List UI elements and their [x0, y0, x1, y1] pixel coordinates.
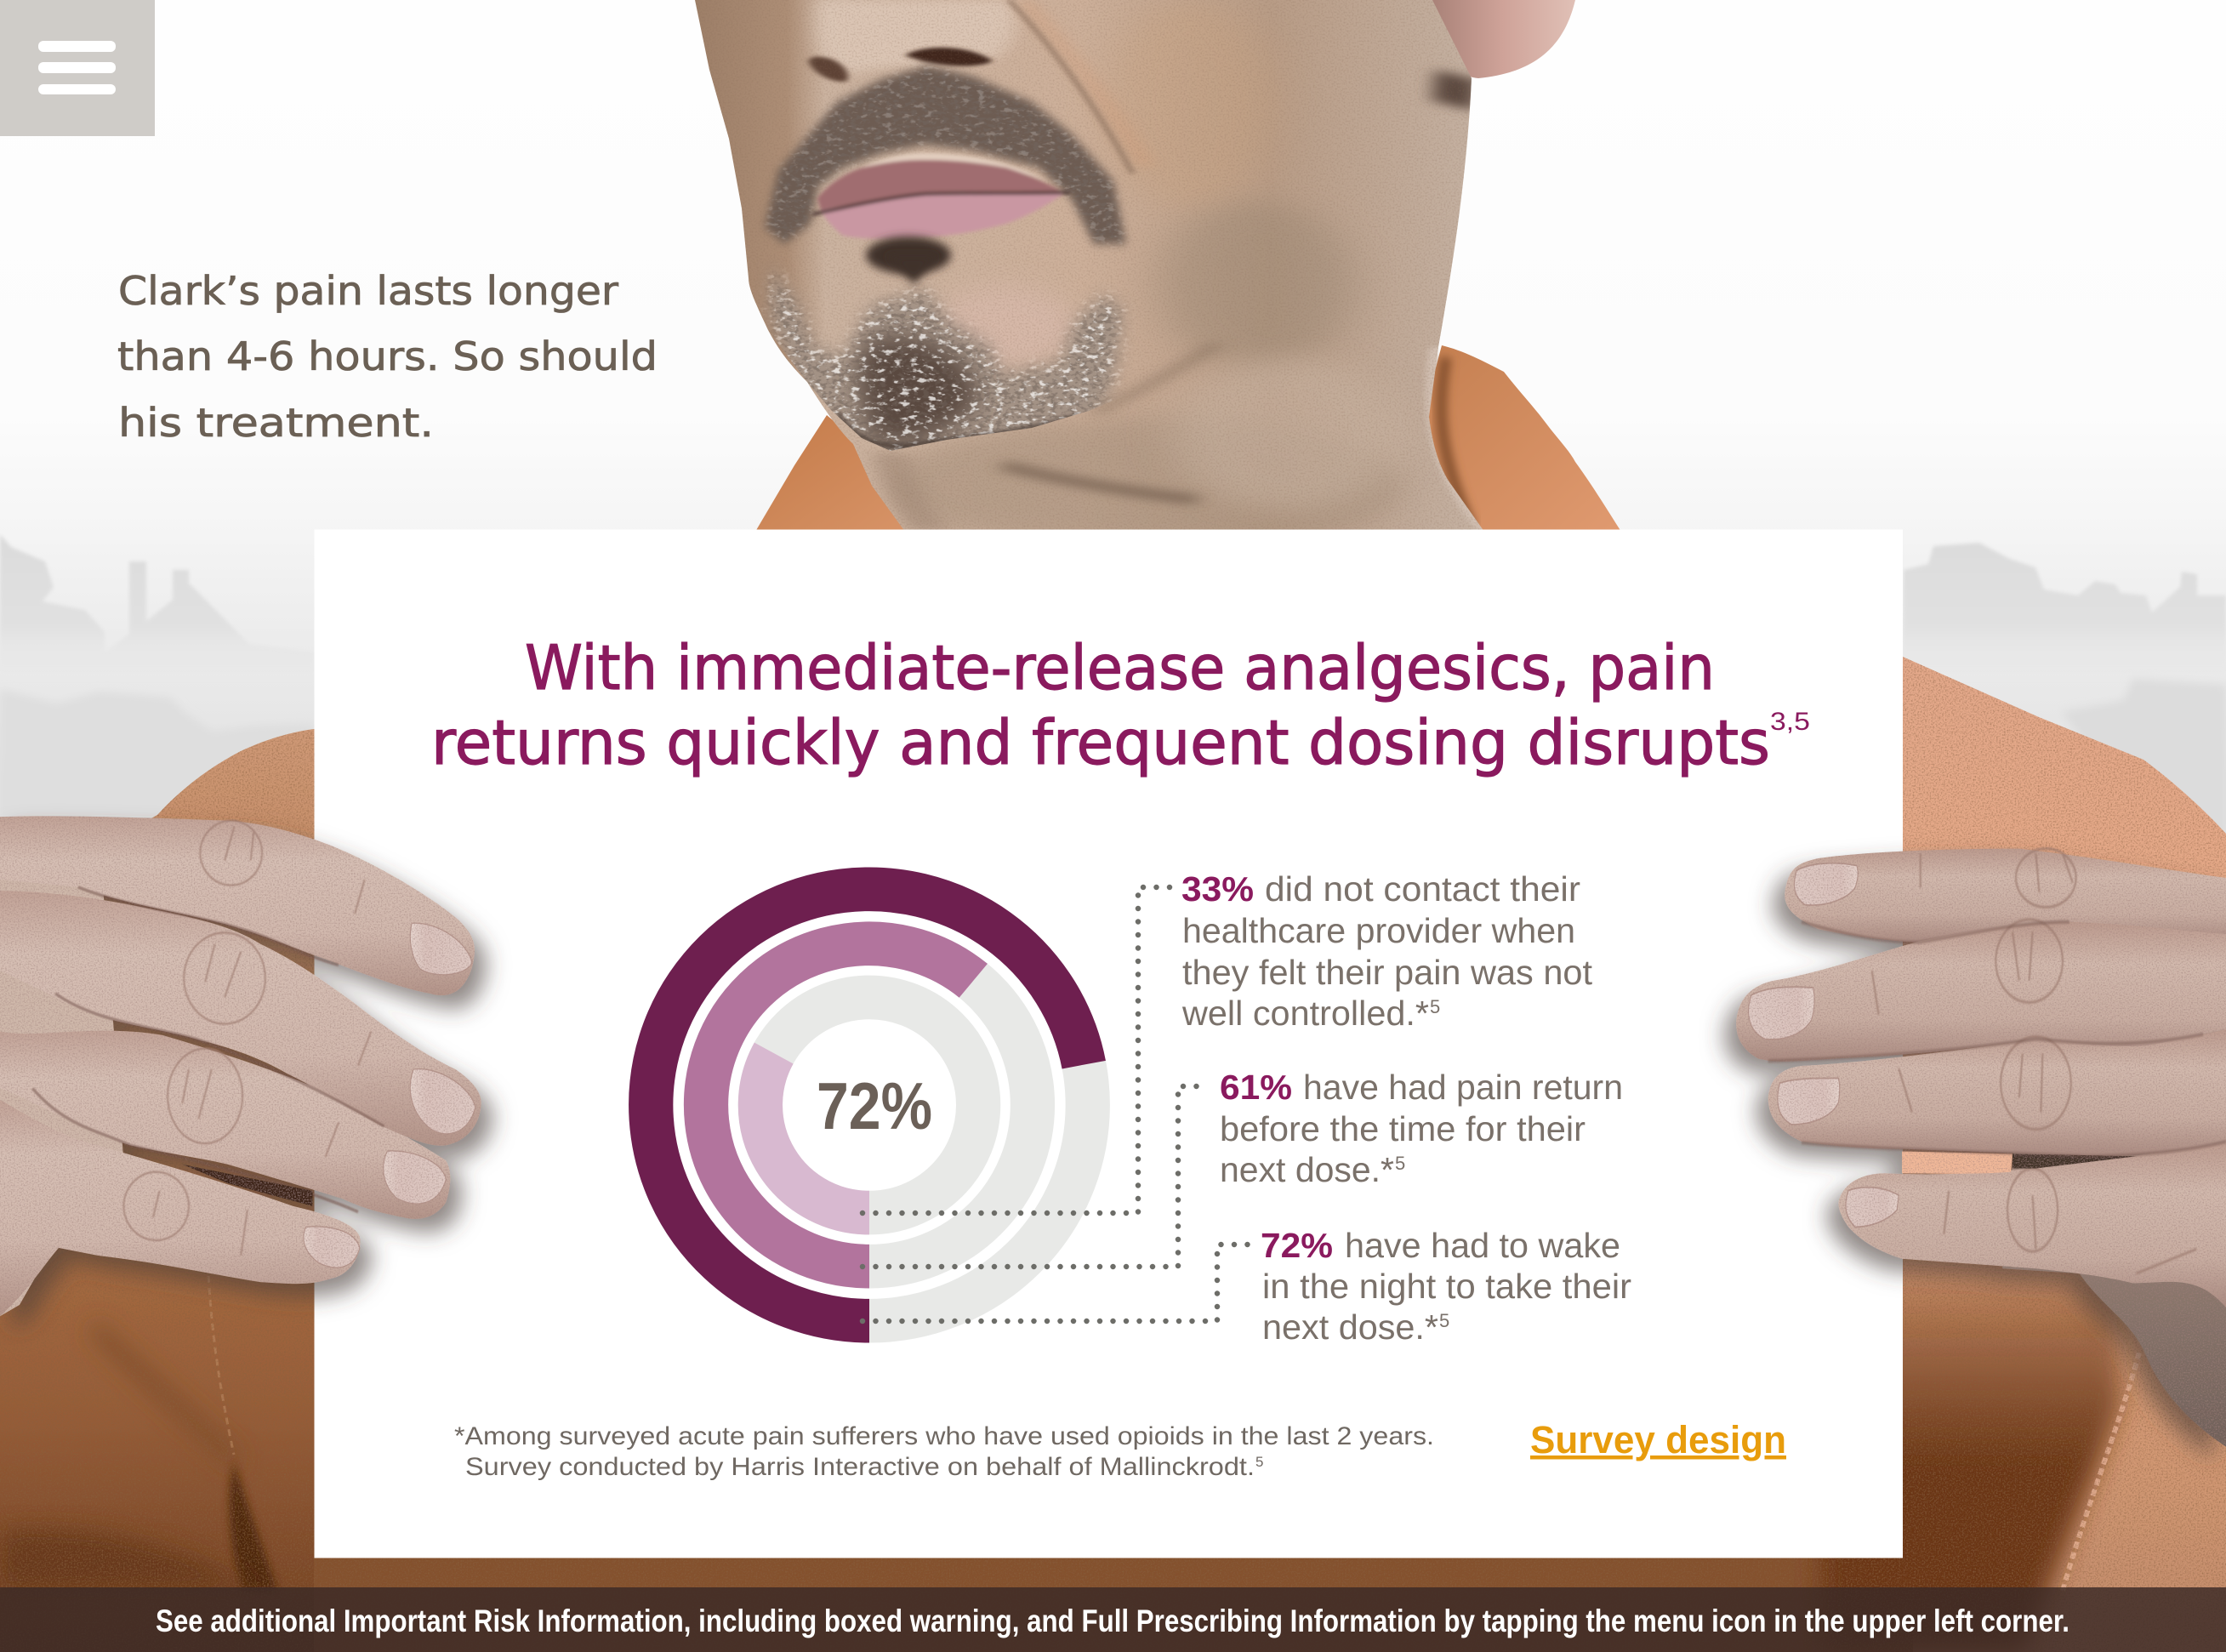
photo: left hand with four fingers [0, 816, 481, 1316]
footnote: 5 [1255, 1454, 1263, 1470]
mustache [761, 63, 1130, 250]
callout: 33%: did not contact their [1265, 869, 1580, 909]
middle finger [0, 891, 481, 1146]
gap between fingers [1902, 1151, 2013, 1174]
callout: 72% [1261, 1226, 1631, 1347]
soul patch [866, 236, 951, 285]
callout: 61%: 61% [1220, 1068, 1292, 1107]
ear [1432, 0, 1575, 78]
dotted leader lines [863, 887, 1249, 1321]
callout: 61% [1220, 1068, 1623, 1189]
intro text: his treatment. [118, 400, 434, 446]
shirt lower strip and folds [0, 1191, 2139, 1652]
footnote: *Among surveyed acute pain sufferers who have used opioids in the last 2 years. [454, 1422, 1434, 1450]
footnote: Survey conducted by Harris Interactive on behalf of Mallinckrodt. [465, 1453, 1255, 1481]
landscape tree right lower [2061, 679, 2226, 834]
nails [304, 923, 475, 1267]
bottom notice bar [0, 1587, 2226, 1652]
palm [0, 817, 130, 1316]
grey tracks [651, 889, 1088, 1321]
card heading [431, 632, 1810, 778]
middle finger [1736, 922, 2226, 1062]
callout: 61%: before the time for their [1220, 1109, 1586, 1148]
index finger [0, 816, 475, 995]
leader to 72% [863, 1245, 1249, 1321]
link: survey design: Survey design [1530, 1418, 1786, 1461]
leader to 33% [863, 887, 1172, 1213]
chin highlight [953, 291, 1067, 362]
lips [812, 153, 1070, 239]
knuckles [123, 821, 371, 1256]
collar [755, 345, 1621, 532]
knuckles [1872, 849, 2196, 1273]
callout: 33%: well controlled.* [1181, 994, 1429, 1033]
callout: 61%: next dose.* [1220, 1150, 1394, 1189]
card heading: With immediate-release analgesics, pain [525, 632, 1715, 704]
index finger [1785, 849, 2226, 943]
shirt left side [0, 729, 544, 1652]
photo: shirt [0, 657, 2226, 1652]
intro text [117, 268, 658, 446]
center value 72%: 72% [817, 1068, 932, 1143]
callout: 33%: healthcare provider when [1182, 911, 1575, 950]
callout: 33%: they felt their pain was not [1182, 953, 1593, 992]
callout: 72%: have had to wake [1345, 1226, 1620, 1265]
ring finger [1768, 1029, 2226, 1156]
ring finger [0, 1031, 450, 1219]
landscape tree left lower [0, 689, 314, 834]
photo: man's collar, face and neck [680, 0, 1621, 553]
callout: 72%: 5 [1439, 1310, 1449, 1331]
callout: 72%: next dose.* [1262, 1307, 1438, 1347]
nasolabial fold [1022, 3, 1107, 110]
concentric donut chart [651, 889, 1088, 1321]
nose [816, 0, 1016, 72]
finger gap shadows [32, 887, 384, 1212]
footnote [454, 1422, 1434, 1481]
shirt right side [1701, 657, 2226, 1652]
landscape silhouettes right [1903, 543, 2226, 681]
hamburger icon [38, 41, 116, 94]
intro text: than 4-6 hours. So should [117, 333, 658, 379]
white card [315, 529, 1903, 1558]
inner ring 33% [760, 1053, 869, 1213]
little finger [0, 1100, 361, 1316]
finger gap shadows [1768, 922, 2226, 1156]
callout: 72%: in the night to take their [1262, 1267, 1631, 1306]
callout: 61%: have had pain return [1303, 1068, 1623, 1107]
leader to 61% [863, 1086, 1210, 1267]
callout: 33%: 33% [1181, 869, 1254, 909]
landscape silhouettes left [0, 534, 314, 681]
outer ring 72% [651, 889, 1084, 1321]
middle ring 61% [706, 943, 973, 1267]
photo: right hand with four fingers [1736, 849, 2226, 1447]
menu button [0, 0, 155, 136]
callout: 61%: 5 [1395, 1153, 1405, 1174]
nails [1749, 863, 1899, 1227]
neck tone [907, 414, 1398, 529]
intro text: Clark’s pain lasts longer [118, 268, 618, 314]
palm and wrist [2002, 878, 2226, 1447]
skin shading [809, 0, 1504, 531]
callout: 72%: 72% [1261, 1226, 1333, 1265]
callout: 33%: 5 [1430, 996, 1440, 1017]
card heading: returns quickly and frequent dosing disrupts [431, 707, 1770, 778]
callout: 33% [1181, 869, 1593, 1033]
little finger [1838, 1142, 2226, 1307]
card heading: 3,5 [1770, 708, 1810, 736]
goatee [760, 271, 1130, 451]
face and neck skin [680, 0, 1504, 553]
